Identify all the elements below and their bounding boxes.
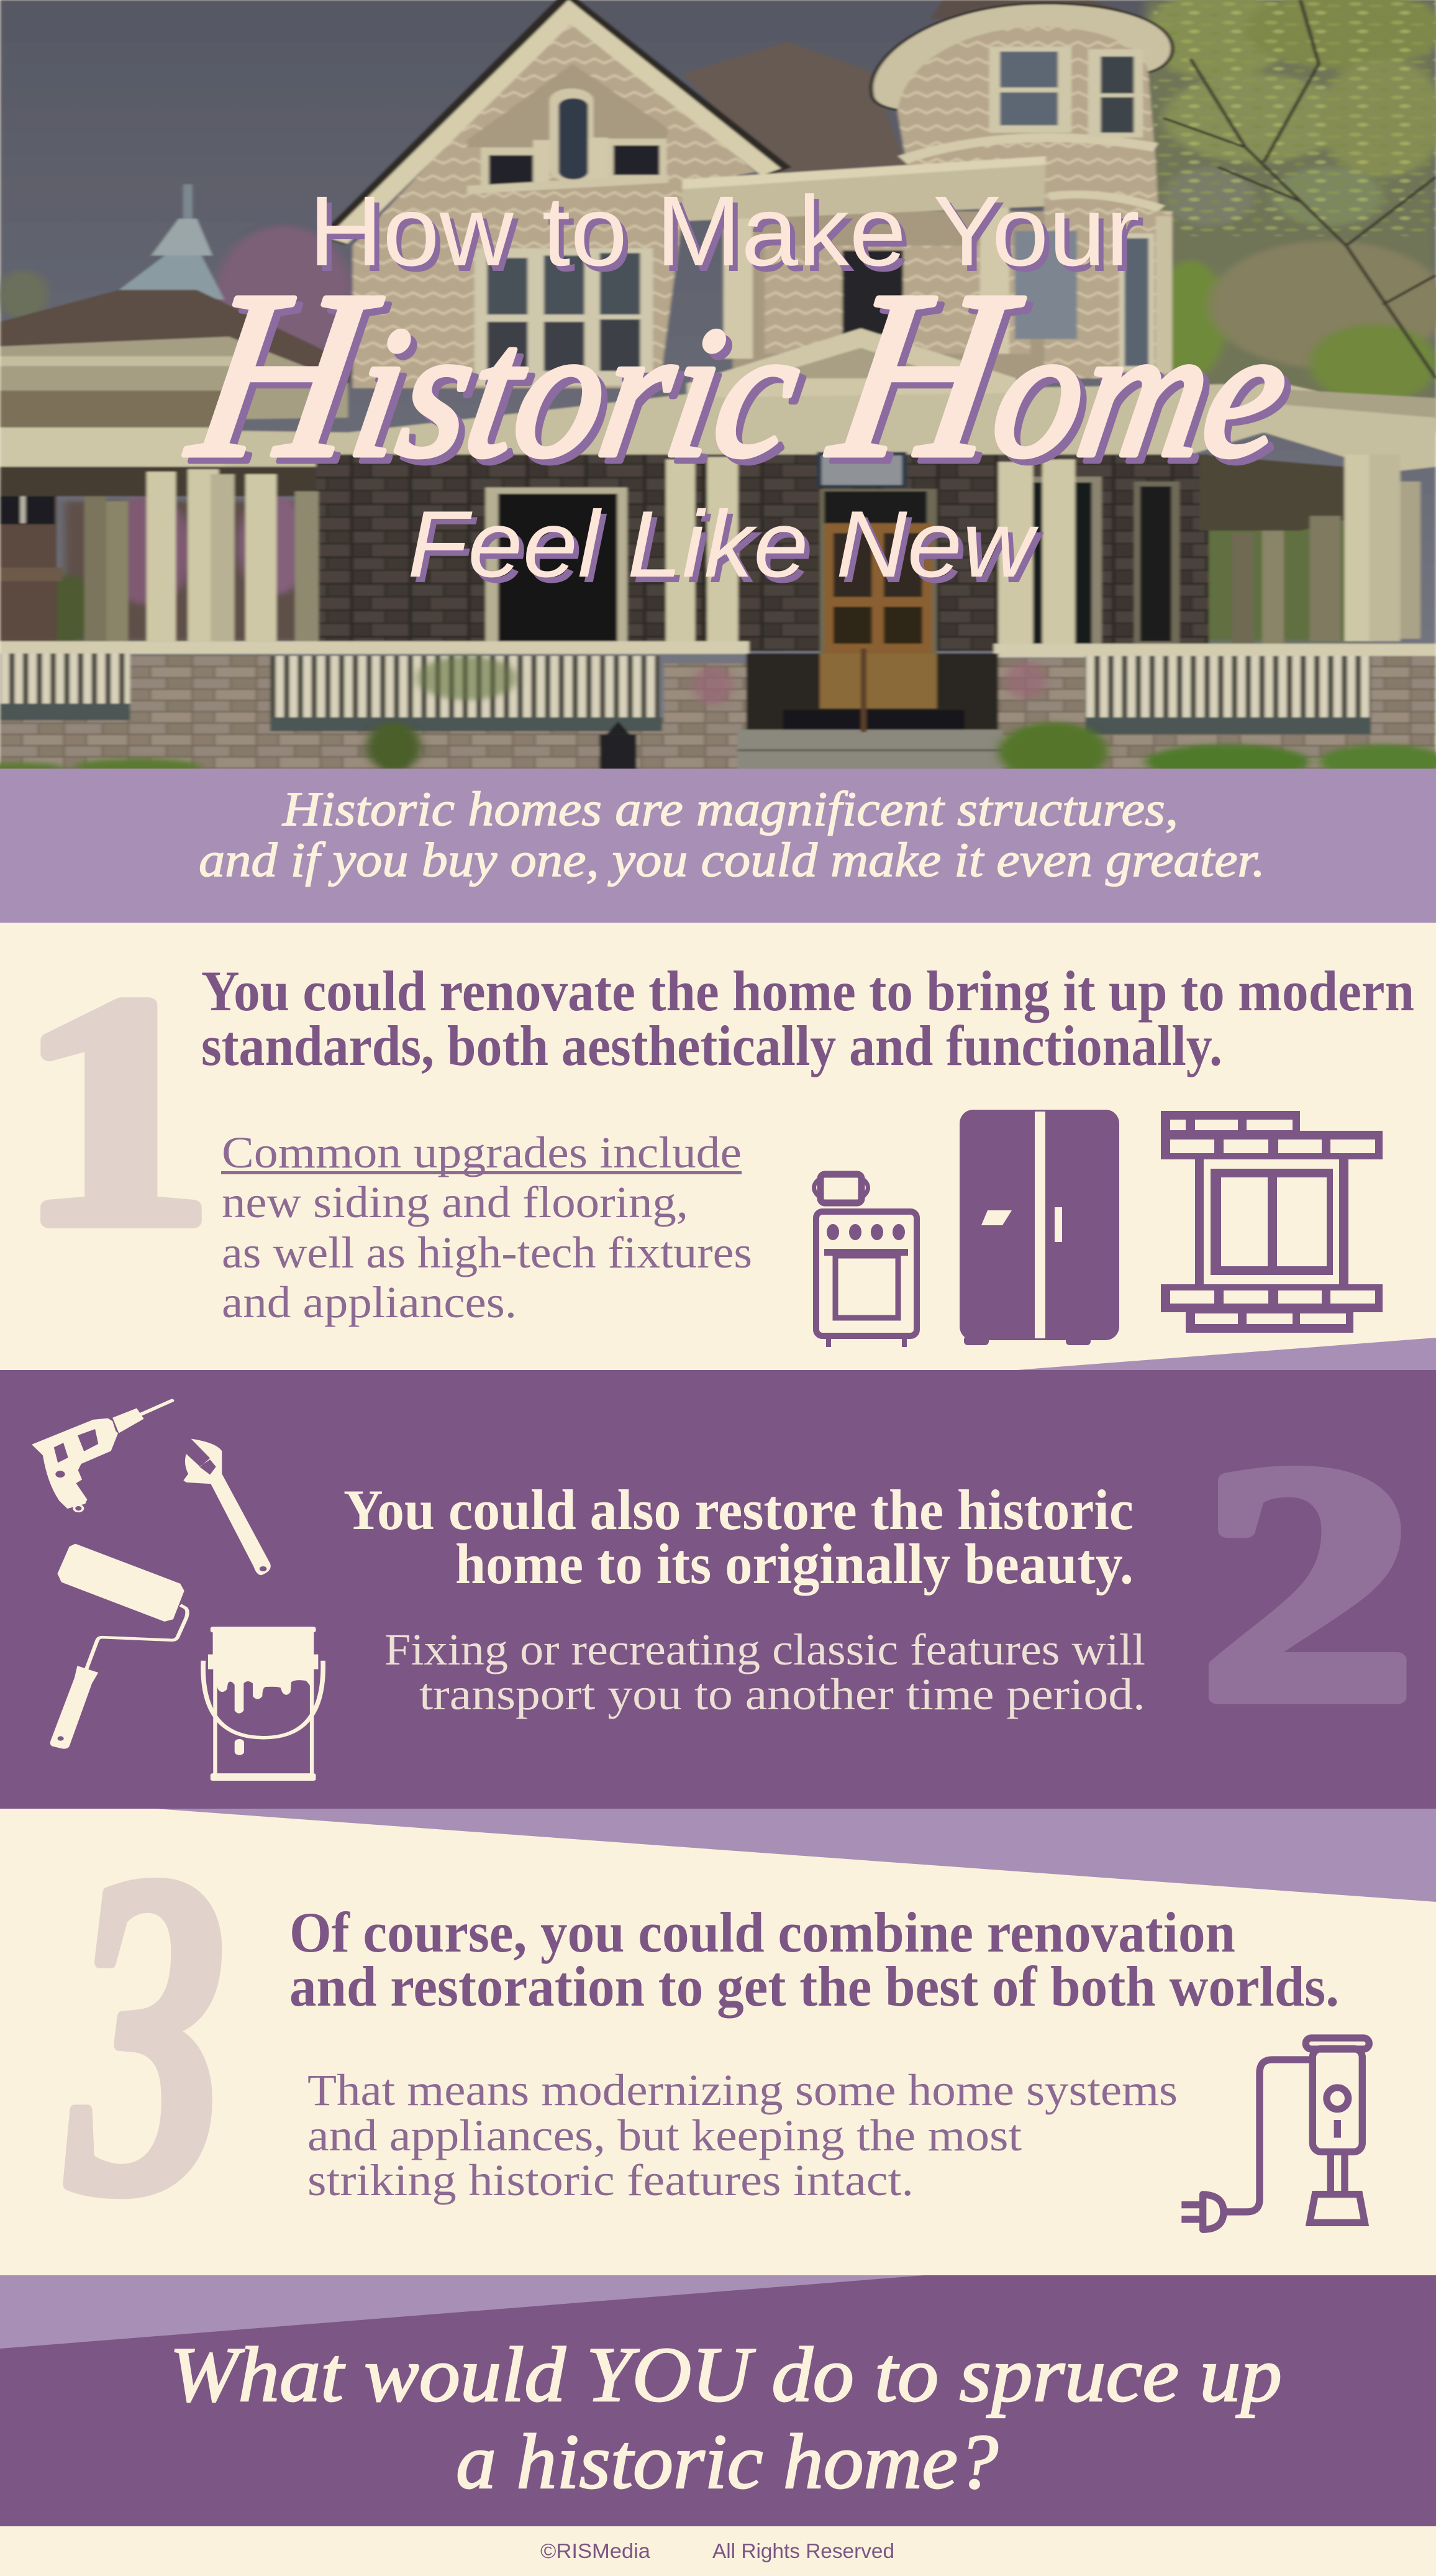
- hero title: [174, 175, 1311, 597]
- heading 3: and restoration to get the best of both worlds.: [289, 1955, 1339, 2018]
- panel: step 1 renovate: [0, 923, 1436, 1370]
- icon: paint roller: [50, 1544, 188, 1749]
- intro text: [199, 782, 1265, 887]
- footer credits: [540, 2539, 894, 2562]
- trees on right: [1145, 0, 1436, 432]
- panel: step 2 restore: [0, 1370, 1436, 1809]
- icon: hand blender: [1181, 2038, 1369, 2229]
- numeral 3: 3: [65, 1779, 226, 2288]
- intro text: Historic homes are magnificent structures,: [282, 782, 1178, 836]
- heading 2: [343, 1478, 1134, 1596]
- heading 1: standards, both aesthetically and functionally.: [201, 1014, 1222, 1077]
- footer credits: ©RISMedia: [540, 2539, 651, 2562]
- back roof: [683, 42, 907, 173]
- question text: [170, 2332, 1282, 2505]
- panel: step 3 combine: [0, 1779, 1436, 2288]
- heading 1: [201, 959, 1414, 1077]
- icon: window with bricks: [1161, 1111, 1383, 1333]
- numeral 2: 2: [1200, 1395, 1416, 1770]
- stone wall: [316, 454, 1209, 651]
- body text 2: [384, 1625, 1145, 1719]
- icons: tools: [32, 1400, 323, 1781]
- left neighbour building: [0, 479, 57, 641]
- right porch ceiling: [1200, 454, 1401, 531]
- windows and door: [483, 451, 1181, 655]
- body text 2: Fixing or recreating classic features will: [384, 1625, 1145, 1674]
- intro band: [0, 769, 1436, 923]
- body text 1: Common upgrades include: [222, 1128, 742, 1177]
- title line: Historic Home: Historic Home: [174, 242, 1311, 506]
- heading 3: Of course, you could combine renovation: [289, 1901, 1235, 1964]
- question text: What would YOU do to spruce up: [170, 2332, 1282, 2418]
- main gable: [332, 6, 778, 388]
- body text 1: [221, 1128, 752, 1327]
- lamp post: [600, 721, 637, 770]
- body text 3: That means modernizing some home systems: [307, 2065, 1178, 2115]
- icon: drill: [32, 1400, 172, 1512]
- icon: paint can: [203, 1627, 323, 1781]
- numeral 1: 1: [18, 929, 213, 1292]
- columns: [84, 454, 1420, 649]
- question text: a historic home?: [456, 2419, 998, 2505]
- spire and left roof: [0, 185, 353, 427]
- icon: wrench: [183, 1439, 271, 1575]
- tower: [871, 0, 1173, 378]
- heading 3: [289, 1901, 1339, 2018]
- body text 3: [307, 2065, 1178, 2205]
- body text 2: transport you to another time period.: [419, 1669, 1145, 1719]
- title line: Feel Like New: Feel Like New: [407, 491, 1039, 597]
- heading 2: home to its originally beauty.: [455, 1532, 1134, 1596]
- heading 2: You could also restore the historic: [343, 1478, 1134, 1541]
- porch base and railings: [0, 641, 1436, 770]
- body text 1: new siding and flooring,: [222, 1177, 688, 1227]
- hero photo: Victorian house: [0, 0, 1436, 781]
- icon: refrigerator: [960, 1110, 1119, 1345]
- body text 1: as well as high-tech fixtures: [222, 1228, 752, 1277]
- pink tree: [27, 226, 1365, 644]
- footer credits: All Rights Reserved: [712, 2539, 894, 2562]
- body text 3: and appliances, but keeping the most: [307, 2111, 1022, 2160]
- intro text: and if you buy one, you could make it even greater.: [199, 833, 1265, 887]
- panel: closing question: [0, 2275, 1436, 2526]
- porch gable and fascia: [0, 328, 1436, 496]
- body text 3: striking historic features intact.: [307, 2155, 914, 2205]
- icon: stove: [814, 1174, 917, 1347]
- body text 1: and appliances.: [222, 1277, 517, 1327]
- plants: [0, 656, 1436, 781]
- central balcony: [683, 156, 1172, 378]
- far left tree: [0, 270, 48, 319]
- title line: How to Make Your: How to Make Your: [309, 175, 1140, 286]
